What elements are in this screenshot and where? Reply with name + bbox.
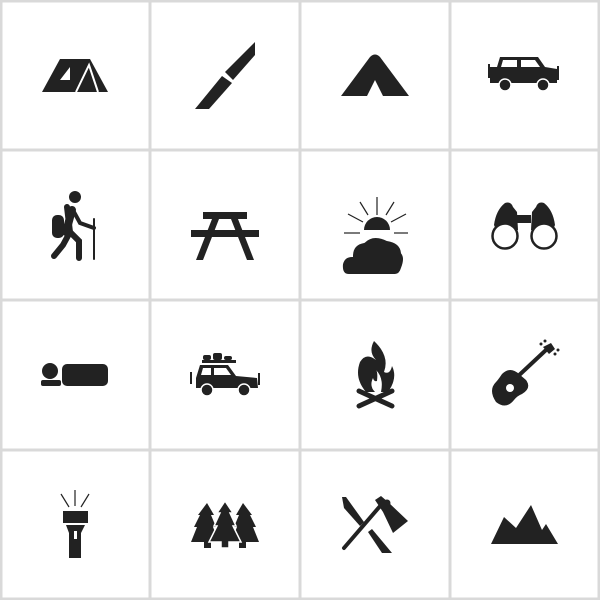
icon: jeep	[488, 57, 559, 91]
icon: mountains	[491, 505, 558, 544]
icon: hiker	[52, 191, 94, 259]
icon: picnic table	[191, 212, 259, 260]
icon: knife	[195, 42, 255, 109]
icon: dome tent	[341, 54, 409, 96]
icon: binoculars	[492, 202, 556, 248]
icon: car with roof rack	[190, 353, 260, 396]
icon: sleeping bag	[41, 363, 108, 386]
icon: flashlight	[61, 490, 89, 558]
icon: guitar	[492, 340, 560, 406]
icon: campfire	[358, 341, 394, 406]
icon: pine trees	[191, 501, 259, 548]
icon: sun behind cloud	[342, 197, 408, 275]
icon: tent	[42, 59, 108, 92]
icon: axe and knife	[342, 496, 408, 553]
